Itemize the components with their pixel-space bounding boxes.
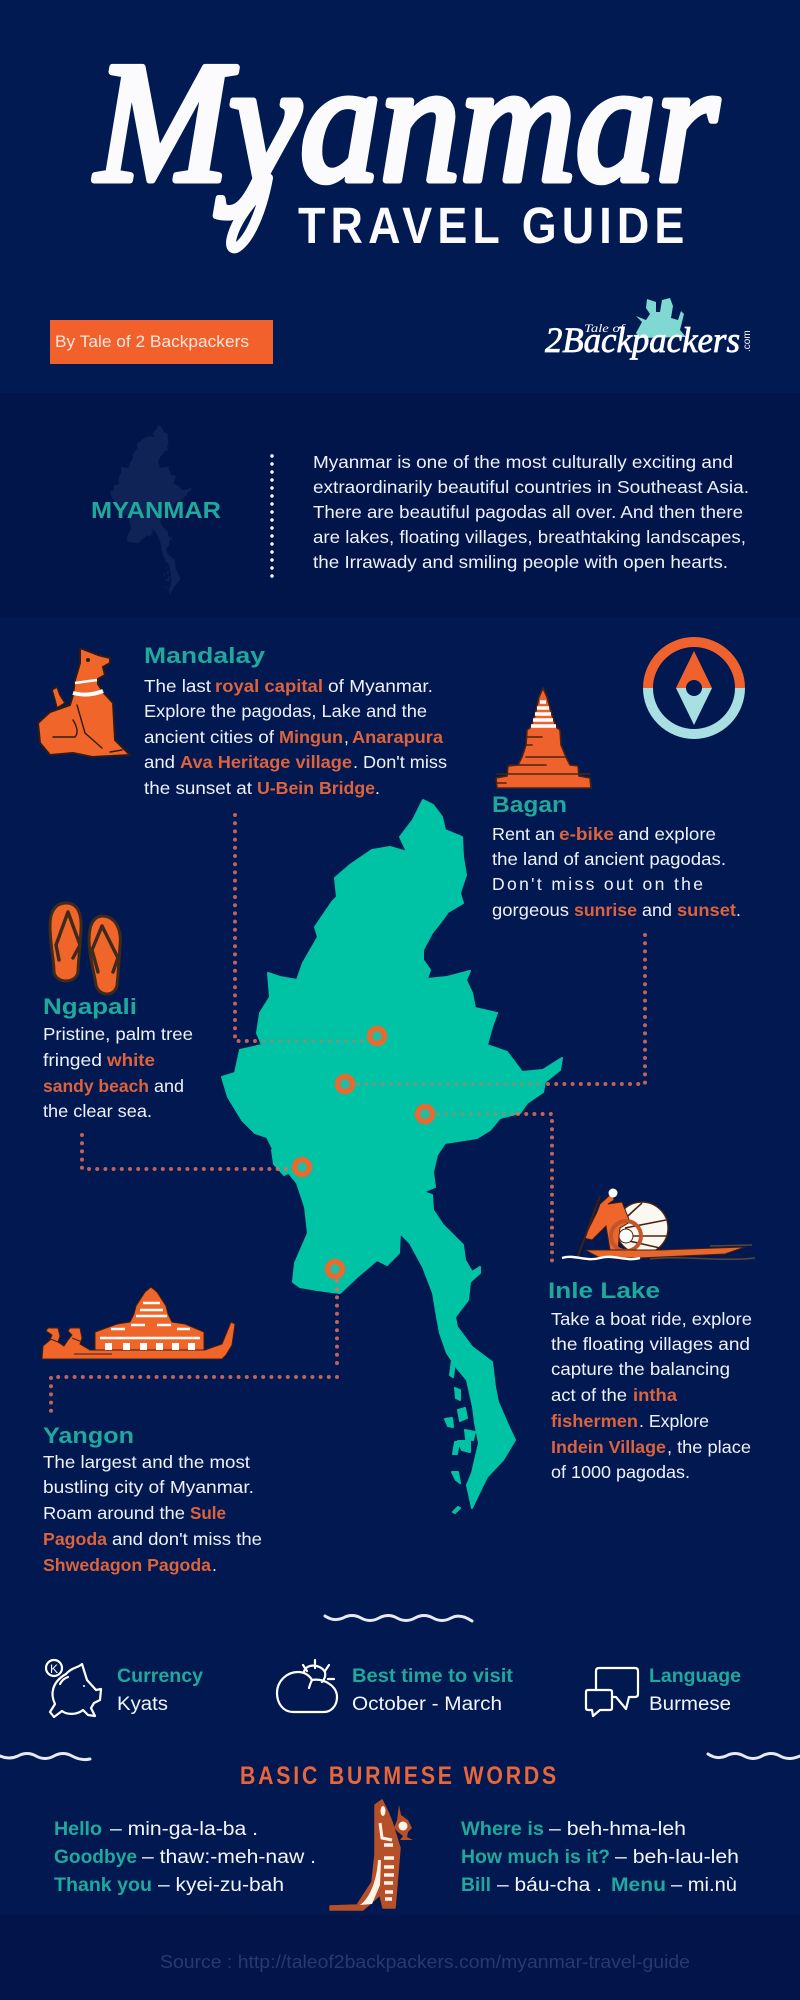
text: Bagan: sunrise: [574, 900, 637, 920]
text: Mandalay: .: [375, 778, 380, 798]
byline badge: [50, 320, 273, 364]
text: Yangon: bustling city of Myanmar.: [43, 1477, 254, 1497]
intro text: There are beautiful pagodas all over. And then there: [313, 502, 743, 522]
text: Mandalay: The last: [144, 676, 211, 696]
icon: royal barge: [42, 1287, 235, 1359]
title script word: Myanmar: [93, 28, 719, 218]
text: Yangon: Shwedagon Pagoda: [43, 1555, 211, 1575]
text: Inle Lake: of 1000 pagodas.: [551, 1462, 690, 1482]
map markers: [294, 1028, 432, 1276]
panel: Burmese phrases right: Menu: [611, 1875, 666, 1896]
text: Bagan: Bagan: [492, 792, 567, 817]
heading: country name: MYANMAR: [91, 497, 221, 523]
text: Mandalay: Explore the pagodas, Lake and the: [144, 701, 427, 721]
icon: piggy bank: K: [50, 1662, 58, 1676]
panel: Burmese phrases right: Bill: [461, 1875, 491, 1896]
map of Myanmar: [222, 800, 562, 1513]
text: Mandalay: and: [144, 752, 175, 772]
text: Ngapali: white: [106, 1050, 155, 1070]
text: Inle Lake: intha: [633, 1385, 677, 1405]
icon: compass: [648, 642, 740, 734]
fact: language: Language: [649, 1666, 741, 1687]
intro text: extraordinarily beautiful countries in Southeast Asia.: [313, 477, 749, 497]
text: Yangon: [43, 1423, 262, 1575]
text: Ngapali: Pristine, palm tree: [43, 1024, 193, 1044]
text: Ngapali: the clear sea.: [43, 1101, 152, 1121]
text: Bagan: Rent an: [492, 824, 555, 844]
text: Yangon: and don't miss the: [112, 1529, 262, 1549]
intro text: are lakes, floating villages, breathtaking landscapes,: [313, 527, 746, 547]
intro text: Myanmar is one of the most culturally exciting and: [313, 452, 733, 472]
text: Bagan: the land of ancient pagodas.: [492, 849, 726, 869]
panel: Burmese phrases left: Thank you: [54, 1875, 152, 1896]
text: Bagan: .: [736, 900, 741, 920]
text: Mandalay: Ava Heritage village: [180, 752, 352, 772]
icon: chat bubbles: [586, 1668, 638, 1716]
fact: best time to visit: Best time to visit: [352, 1666, 514, 1687]
text: Yangon: Pagoda: [43, 1529, 107, 1549]
text: Inle Lake: fishermen: [551, 1411, 638, 1431]
text: Bagan: and: [642, 900, 672, 920]
text: Bagan: e-bike: [559, 824, 614, 844]
text: Inle Lake: Take a boat ride, explore: [551, 1309, 752, 1329]
panel: Burmese phrases right: How much is it?: [461, 1847, 610, 1868]
text: Bagan: [492, 792, 741, 920]
icon: flip flops: [50, 903, 120, 994]
text: Mandalay: Mingun: [279, 727, 343, 747]
text: Mandalay: ,: [344, 727, 349, 747]
logo: 2 backpackers: 2Backpackers: [545, 320, 740, 360]
intro text: the Irrawady and smiling people with open hearts.: [313, 552, 728, 572]
text: Ngapali: [43, 994, 193, 1121]
fact: currency: [46, 1660, 203, 1717]
fact: language: [586, 1666, 741, 1716]
panel: Burmese phrases right: – mi.nù: [671, 1875, 737, 1896]
text: Inle Lake: . Explore: [639, 1411, 709, 1431]
panel: Burmese phrases right: – báu-cha .: [497, 1875, 602, 1896]
text: Inle Lake: the floating villages and: [551, 1334, 750, 1354]
text: Bagan: sunset: [677, 900, 736, 920]
text: Mandalay: the sunset at: [144, 778, 252, 798]
panel: Burmese phrases left: Goodbye: [54, 1847, 137, 1868]
text: Inle Lake: , the place: [667, 1437, 751, 1457]
logo: 2 backpackers: [545, 298, 753, 360]
byline badge: By Tale of 2 Backpackers: [55, 333, 249, 351]
panel: Burmese phrases right: – beh-lau-leh: [615, 1847, 739, 1868]
text: Bagan: gorgeous: [492, 900, 569, 920]
text: Mandalay: of Myanmar.: [328, 676, 433, 696]
icon: Inle fisherman: [562, 1188, 755, 1259]
text: Inle Lake: Indein Village: [551, 1437, 666, 1457]
icon: Bagan pagoda: [496, 688, 591, 788]
intro text: [313, 452, 749, 572]
text: Mandalay: ancient cities of: [144, 727, 274, 747]
text: Mandalay: Mandalay: [144, 643, 266, 668]
fact: currency: Currency: [117, 1666, 203, 1687]
text: Inle Lake: act of the: [551, 1385, 627, 1405]
heading: basic Burmese words: BASIC BURMESE WORDS: [240, 1761, 556, 1789]
title: [93, 28, 719, 255]
logo: 2 backpackers: Tale of: [584, 321, 626, 335]
text: Bagan: Don't miss out on the: [492, 874, 703, 894]
text: Mandalay: Anarapura: [352, 727, 443, 747]
icon: sun and cloud: [277, 1660, 337, 1712]
text: Inle Lake: capture the balancing: [551, 1359, 730, 1379]
panel: Burmese phrases left: – min-ga-la-ba .: [110, 1819, 258, 1840]
text: Mandalay: royal capital: [215, 676, 323, 696]
text: Ngapali: fringed: [43, 1050, 102, 1070]
text: Ngapali: sandy beach: [43, 1076, 149, 1096]
text: Yangon: .: [212, 1555, 217, 1575]
panel: Burmese phrases right: [461, 1819, 739, 1896]
panel: Burmese phrases right: – beh-hma-leh: [549, 1819, 686, 1840]
text: Bagan: and explore: [618, 824, 716, 844]
fact: best time to visit: [277, 1660, 514, 1715]
text: Ngapali: Ngapali: [43, 994, 137, 1019]
text: Yangon: Sule: [190, 1503, 226, 1523]
source line: Source : http://taleof2backpackers.com/myanmar-travel-guide: [160, 1952, 690, 1972]
route lines: [51, 815, 645, 1414]
panel: Burmese phrases left: Hello: [54, 1819, 102, 1840]
icon: piggy bank: [46, 1660, 101, 1717]
panel: intro: [91, 425, 749, 596]
text: Yangon: Yangon: [43, 1423, 134, 1448]
panel: Burmese phrases left: [54, 1819, 316, 1896]
text: Ngapali: and: [154, 1076, 184, 1096]
icon: ghost map of Myanmar: [110, 425, 192, 596]
fact: language: Burmese: [649, 1694, 731, 1715]
panel: Burmese phrases right: Where is: [461, 1819, 544, 1840]
icon: figure holding offering: [330, 1800, 413, 1910]
text: Inle Lake: Inle Lake: [548, 1278, 660, 1303]
subtitle: TRAVEL GUIDE: [298, 198, 684, 255]
panel: Burmese phrases left: – kyei-zu-bah: [158, 1875, 284, 1896]
text: Yangon: Roam around the: [43, 1503, 185, 1523]
text: Mandalay: U-Bein Bridge: [257, 778, 375, 798]
fact: best time to visit: October - March: [352, 1694, 502, 1715]
fact: currency: Kyats: [117, 1694, 168, 1715]
text: Mandalay: . Don't miss: [353, 752, 447, 772]
text: Inle Lake: [548, 1278, 752, 1482]
text: Yangon: The largest and the most: [43, 1452, 250, 1472]
icon: backpacker silhouettes: [636, 298, 686, 338]
text: Mandalay: [144, 643, 447, 798]
icon: lion statue: [38, 648, 130, 757]
logo: 2 backpackers: .com: [742, 330, 753, 352]
panel: Burmese phrases left: – thaw:-meh-naw .: [142, 1847, 316, 1868]
